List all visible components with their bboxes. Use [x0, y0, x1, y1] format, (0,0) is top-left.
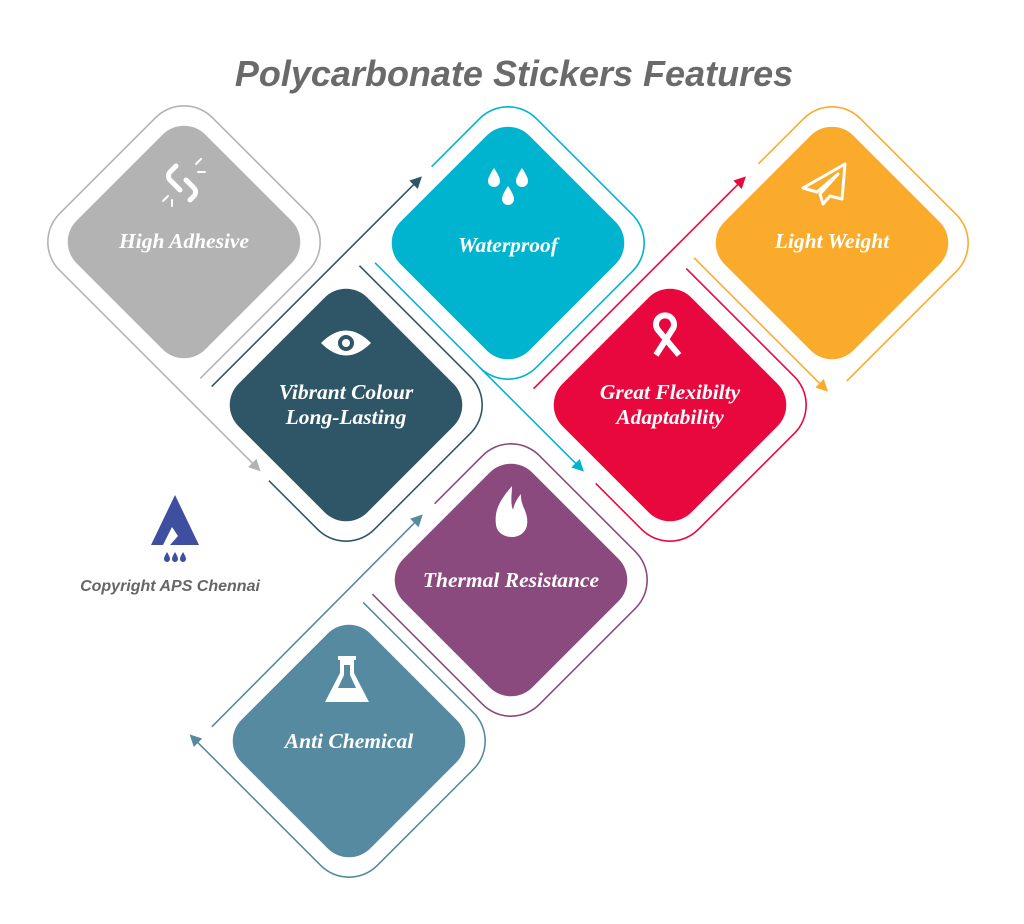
- card: Waterproof: Waterproof: [458, 233, 560, 257]
- card: Thermal Resistance: [358, 427, 664, 733]
- logo: [151, 495, 199, 562]
- card: Thermal Resistance: Thermal Resistance: [423, 568, 600, 592]
- card: Light Weight: Light Weight: [774, 229, 890, 253]
- copyright text: Copyright APS Chennai: [80, 578, 260, 595]
- card: Anti Chemical: [191, 511, 574, 894]
- card: Anti Chemical: Anti Chemical: [283, 729, 413, 753]
- title: Polycarbonate Stickers Features: [235, 53, 793, 94]
- icon: ribbon: [656, 315, 679, 355]
- card: Vibrant Colour: Long-Lasting: [285, 405, 407, 429]
- card: Light Weight: [679, 90, 985, 396]
- icon: flame: [496, 486, 527, 537]
- icon: drops: [488, 168, 528, 205]
- card: Great Flexibility: Great Flexibilty: [600, 380, 741, 404]
- card: Great Flexibility: Adaptability: [614, 405, 724, 429]
- card: Great Flexibility: [517, 178, 897, 558]
- card: Waterproof: [355, 90, 735, 470]
- card: High Adhesive: [31, 89, 412, 470]
- card: High Adhesive: High Adhesive: [118, 229, 249, 253]
- icon: paper plane: [803, 164, 845, 204]
- icon: flask: [325, 656, 369, 702]
- card: Vibrant Colour: [193, 178, 573, 558]
- icon: broken link: [163, 159, 205, 206]
- card: Vibrant Colour: Vibrant Colour: [279, 380, 414, 404]
- icon: eye: [321, 330, 371, 356]
